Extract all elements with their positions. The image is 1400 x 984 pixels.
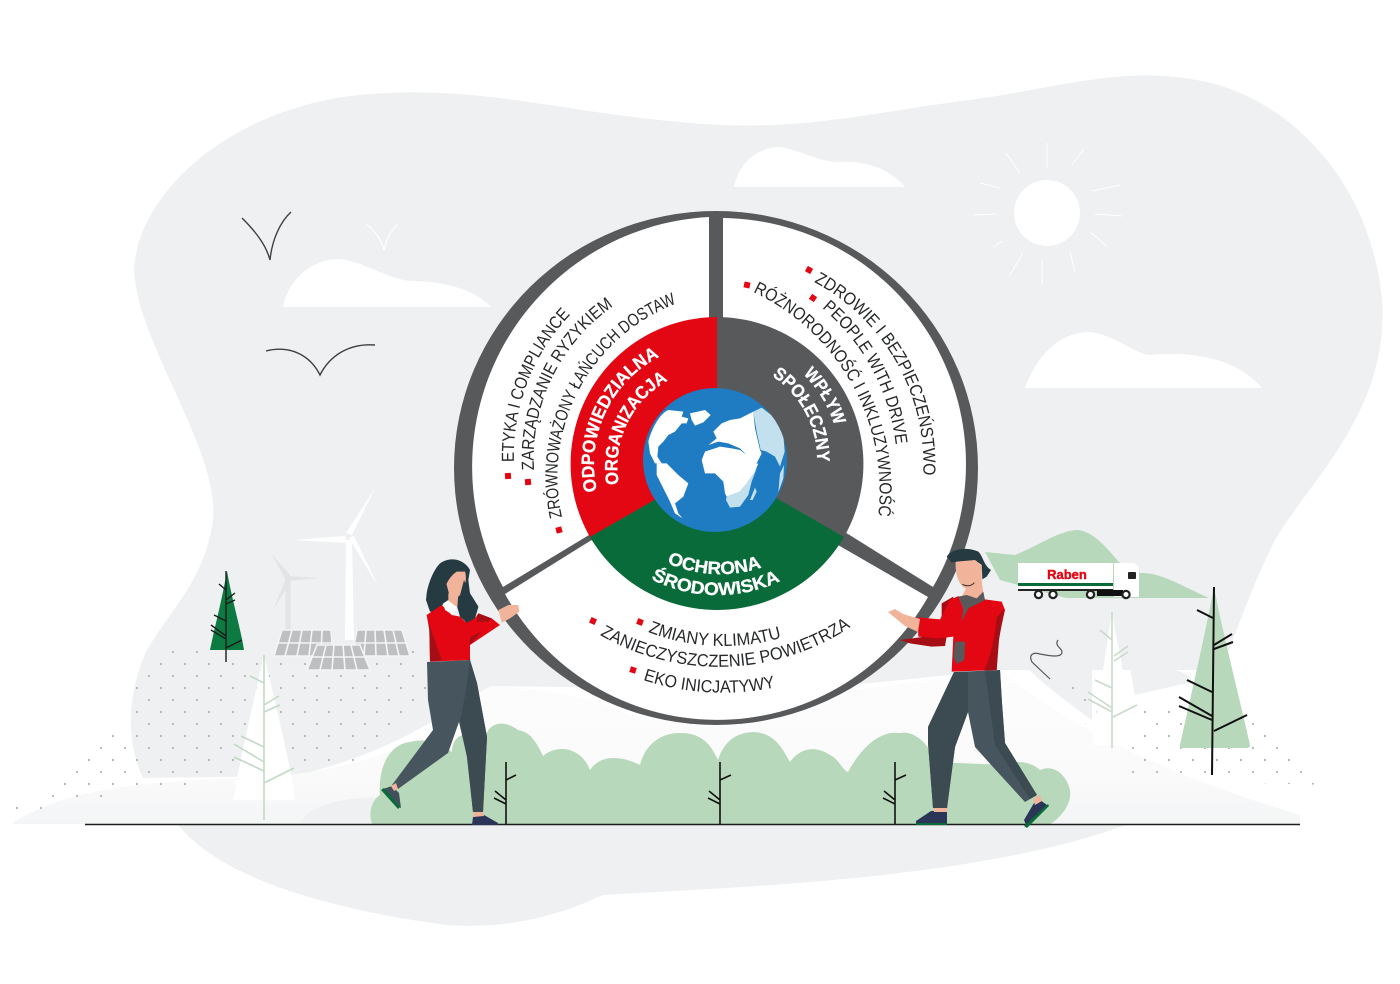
dotted texture left (12, 640, 428, 815)
list: social impact topics: ZDROWIE I BEZPIECZEŃSTWO (814, 272, 936, 475)
man pocket (953, 642, 965, 664)
list: environment topics: ZANIECZYSZCZENIE POWIETRZA (600, 619, 851, 667)
cloud top centre (734, 147, 905, 187)
small black trees on ground (494, 762, 906, 824)
truck trailer (1018, 563, 1113, 591)
background: lower ground blob (178, 825, 1125, 926)
icon: sun (974, 143, 1122, 285)
list: responsible organisation topics: ETYKA I COMPLIANCE (502, 307, 570, 461)
background: large grey landscape blob (131, 75, 1383, 778)
woman hair side (458, 580, 478, 623)
woman hair (426, 559, 478, 623)
truck logo: Raben (1047, 567, 1087, 582)
man neck (962, 580, 983, 603)
wheel outer ring (454, 211, 978, 725)
list: responsible organisation topics: ZARZĄDZANIE RYZYKIEM (522, 297, 612, 470)
list: responsible organisation topics: ZRÓWNOWAŻONY ŁAŃCUCH DOSTAW (543, 292, 674, 518)
Africa (702, 447, 758, 497)
list: environment topics: ZMIANY KLIMATU (648, 621, 780, 646)
East Asia shaded (753, 408, 785, 467)
heading: Odpowiedzialna organizacja: ORGANIZACJA (604, 372, 668, 484)
bird lower (266, 345, 375, 375)
figure: man pushing wheel (888, 549, 1049, 828)
Southern Africa shaded (726, 468, 757, 508)
Greenland (690, 410, 711, 426)
man mouth (962, 583, 974, 586)
woman neck and face (448, 593, 458, 607)
list: environment topics: EKO INICJATYWY (644, 668, 773, 693)
woman collar (443, 600, 457, 615)
figure: woman pushing wheel (381, 559, 519, 825)
background: light ground wash (14, 670, 1300, 824)
man collar and tie (958, 592, 985, 622)
man back sleeve (900, 637, 947, 647)
truck wheels (1035, 591, 1130, 598)
tree: large green right (1179, 587, 1250, 775)
segment: social impact background (723, 218, 966, 587)
heading: Ochrona środowiska: ŚRODOWISKA (652, 568, 780, 596)
tree: small dark green (210, 571, 244, 662)
woman hand (498, 605, 519, 623)
South America (657, 463, 688, 518)
green sector (590, 464, 844, 610)
bushes (370, 724, 1070, 824)
Madagascar (750, 488, 757, 500)
list: social impact topics: PEOPLE WITH DRIVE (823, 300, 908, 444)
truck cab (1114, 563, 1139, 597)
red sector (571, 317, 717, 537)
wind turbine white (292, 488, 379, 640)
bird small faint (366, 224, 398, 250)
woman shoes (383, 786, 401, 808)
dotted texture right (1055, 680, 1330, 785)
woman sweater (427, 605, 500, 662)
dark grey sector (717, 317, 863, 537)
solar panel right (352, 630, 410, 656)
man shoes (916, 811, 947, 824)
man legs (928, 670, 1037, 808)
wheel diagram (454, 211, 978, 725)
segment: responsible organisation background (472, 217, 709, 587)
list: responsible organisation topics (502, 292, 674, 534)
man hand (888, 609, 920, 632)
tree: white left (233, 655, 295, 820)
heading: Odpowiedzialna organizacja: ODPOWIEDZIALNA (581, 348, 660, 492)
list: environment topics (589, 617, 851, 693)
man upper body (900, 549, 1005, 672)
man sweater (918, 596, 1005, 672)
tree: white right (1088, 612, 1138, 748)
solar panel front (307, 645, 370, 670)
solar panel left (274, 630, 333, 656)
solar panels (274, 630, 410, 670)
woman upper body (426, 559, 519, 662)
wind turbine grey (271, 553, 320, 638)
heading: Ochrona środowiska: OCHRONA (669, 553, 762, 574)
segment: environment background (505, 480, 928, 720)
cloud right (1025, 332, 1262, 388)
woman fringe (443, 569, 465, 585)
heading: Wpływ społeczny: WPŁYW (804, 365, 846, 423)
ground line (85, 824, 1300, 826)
icon: road squiggle (1031, 640, 1062, 679)
heading: Ochrona środowiska (652, 553, 780, 596)
hills behind truck (985, 530, 1209, 598)
man hair (947, 549, 991, 579)
man face (956, 558, 982, 589)
icon: truck (1018, 563, 1139, 598)
woman legs (392, 660, 487, 812)
Europe and West Asia (708, 412, 762, 467)
background: right grey patches (300, 598, 1192, 823)
North America (648, 410, 688, 463)
icon: globe (643, 388, 787, 532)
heading: Wpływ społeczny: SPOŁECZNY (774, 368, 830, 462)
bird large (242, 212, 291, 260)
list: social impact topics: RÓŻNORODNOŚĆ I INKLUZYWNOŚĆ (754, 282, 896, 516)
cloud left (283, 259, 491, 307)
